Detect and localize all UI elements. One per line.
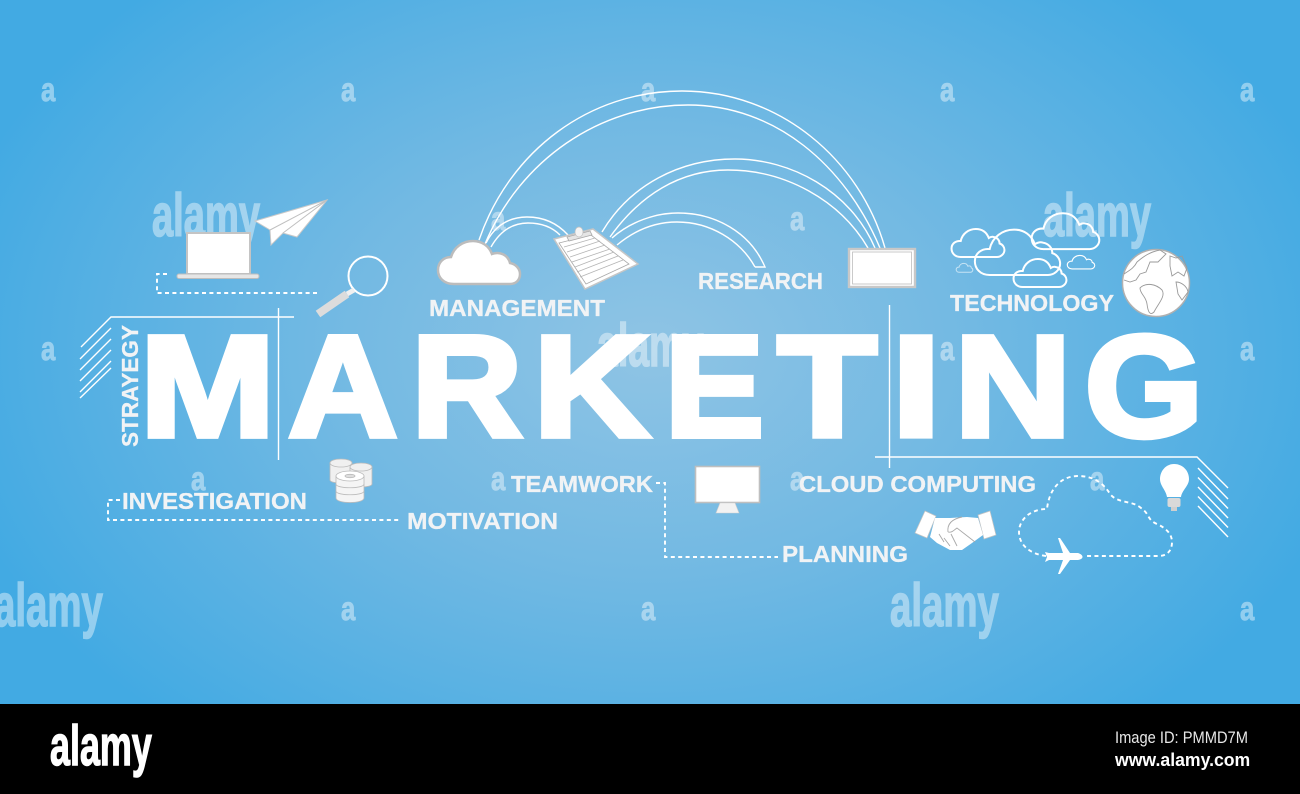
watermark grid: a (1240, 72, 1255, 109)
heading: MARKETING: M (140, 306, 275, 467)
icon: technology clouds (952, 213, 1099, 287)
watermark grid: alamy (152, 182, 260, 249)
label: TECHNOLOGY: TECHNOLOGY (950, 290, 1114, 316)
watermark grid: a (191, 461, 206, 498)
label: INVESTIGATION: INVESTIGATION (122, 488, 307, 514)
icon: cloud (438, 241, 520, 284)
watermark grid: alamy (1043, 182, 1151, 249)
watermark grid: a (790, 461, 805, 498)
icon: tablet (849, 249, 915, 287)
footer url: www.alamy.com (1114, 750, 1250, 770)
label: MANAGEMENT: MANAGEMENT (429, 295, 605, 321)
icon: laptop (177, 233, 259, 278)
watermark grid: a (641, 72, 656, 109)
icon: globe (1122, 250, 1190, 316)
watermark grid: a (341, 72, 356, 109)
watermark grid: a (940, 331, 955, 368)
watermark grid: a (790, 201, 805, 238)
watermark grid: a (1090, 461, 1105, 498)
label: PLANNING: PLANNING (782, 541, 908, 567)
heading: MARKETING: N (954, 306, 1071, 467)
icon: database coins (330, 459, 372, 502)
dashed connector: teamwork to planning (656, 483, 778, 557)
watermark grid: a (341, 331, 356, 368)
icon: airplane (1045, 538, 1082, 574)
footer band (0, 704, 1300, 794)
footer image id: Image ID: PMMD7M (1115, 729, 1248, 747)
heading: MARKETING: G (1085, 307, 1203, 467)
dashed connector: investigation to motivation (108, 500, 400, 520)
watermark grid: alamy (890, 571, 999, 639)
watermark grid: a (940, 72, 955, 109)
label: TEAMWORK: TEAMWORK (511, 471, 653, 497)
icon: clipboard (554, 227, 638, 289)
label: CLOUD COMPUTING: CLOUD COMPUTING (799, 471, 1036, 497)
watermark grid: alamy (597, 312, 703, 379)
watermark grid: a (41, 72, 56, 109)
heading: MARKETING: T (778, 306, 877, 467)
watermark grid: a (341, 591, 356, 628)
watermark grid: a (491, 461, 506, 498)
watermark grid: a (1240, 591, 1255, 628)
footer logo: alamy (50, 715, 152, 778)
label: RESEARCH: RESEARCH (698, 268, 823, 294)
heading: MARKETING: I (891, 306, 941, 467)
watermark grid: a (491, 201, 506, 238)
icon: light bulb (1160, 464, 1189, 511)
icon: handshake (915, 511, 996, 550)
dashed connector: laptop to magnifier (157, 274, 319, 293)
icon: paper plane (255, 200, 327, 245)
icon: monitor (696, 466, 760, 513)
heading: MARKETING: R (412, 305, 522, 467)
heading: MARKETING: K (534, 306, 649, 467)
watermark grid: a (41, 331, 56, 368)
heading: MARKETING: A (288, 307, 397, 467)
watermark grid: a (641, 591, 656, 628)
right frame with hatching (875, 305, 1228, 537)
watermark grid (0, 72, 1255, 639)
label: STRAYEGY: STRAYEGY (117, 325, 143, 447)
heading: MARKETING: E (665, 306, 764, 467)
watermark grid: a (1240, 331, 1255, 368)
connecting arcs (479, 91, 885, 267)
icon: magnifying glass (318, 256, 388, 314)
label: MOTIVATION: MOTIVATION (407, 508, 558, 534)
strategy frame with hatching (80, 308, 294, 460)
heading: MARKETING (140, 305, 1203, 467)
icon: dashed flight cloud (1019, 476, 1172, 556)
